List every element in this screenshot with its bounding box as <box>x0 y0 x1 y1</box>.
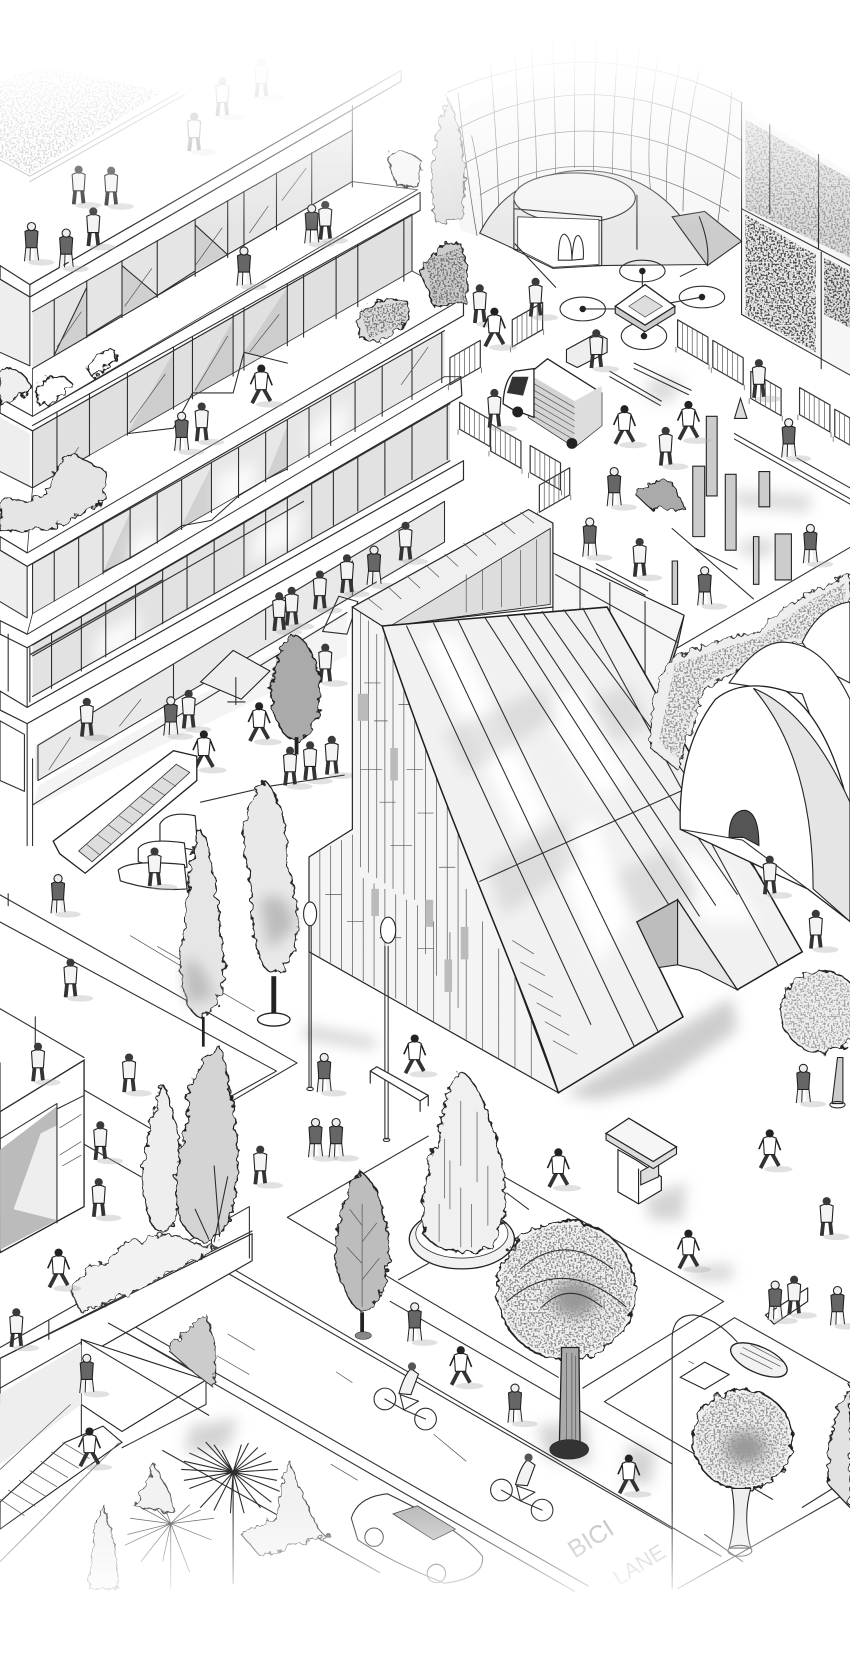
construction site <box>448 260 850 648</box>
stepped parapet <box>352 510 553 626</box>
domed greenhouse <box>431 41 743 287</box>
painted lane lettering: LANE <box>608 1539 670 1590</box>
mullions floor one <box>33 106 352 369</box>
site shadows <box>645 379 813 558</box>
balcony floors <box>27 182 463 634</box>
building corner <box>0 285 33 846</box>
central folded-roof pavilion <box>309 510 802 1100</box>
hedge behind arches <box>650 575 850 770</box>
steel bundles <box>596 363 850 595</box>
white washes on glass <box>92 401 347 667</box>
mullions floor four <box>30 404 450 702</box>
painted lane lettering <box>563 1515 670 1590</box>
structural slabs <box>0 70 463 724</box>
spiky shrubs <box>89 1461 331 1589</box>
pavilion ground shadow <box>564 997 737 1100</box>
cafe umbrella and courtyard tree <box>201 596 358 755</box>
lamp posts <box>304 902 396 1142</box>
rubble and cone <box>637 480 686 510</box>
back wing <box>553 553 684 732</box>
bench <box>370 1067 428 1112</box>
white arches <box>680 602 850 921</box>
right edge tree <box>781 971 850 1108</box>
kiosk <box>606 1118 677 1204</box>
ground washes <box>103 1025 732 1486</box>
right round tree <box>693 1390 792 1556</box>
cyclists <box>374 1362 553 1521</box>
generator crate <box>566 333 607 367</box>
dome inner hall <box>480 170 742 287</box>
site edges <box>672 268 850 648</box>
dome shell and ribs <box>436 41 743 266</box>
zigzag glass folds <box>54 225 287 572</box>
bush beside dome <box>431 98 465 222</box>
palm trees <box>125 1442 279 1589</box>
stairs <box>0 1404 122 1562</box>
barriers <box>448 302 850 518</box>
glass pavilion box <box>0 1009 84 1253</box>
steel columns <box>672 416 791 604</box>
top fade <box>0 0 850 228</box>
walkway hedge <box>71 1234 217 1312</box>
side facade <box>309 607 558 1093</box>
tall cypress tree one <box>181 830 224 1047</box>
convertible car <box>351 1494 483 1583</box>
vertical garden wall <box>742 103 850 375</box>
workers and upper people <box>24 58 833 790</box>
fountain tree with round planter <box>409 1071 514 1269</box>
mullions floor two <box>33 214 412 488</box>
glass shading <box>0 130 450 808</box>
main building <box>0 70 463 846</box>
folded roof plane <box>382 607 802 1093</box>
escalator and spiral steps <box>53 751 344 891</box>
faded roof garden <box>0 65 184 182</box>
twin cypress trees <box>143 1047 238 1242</box>
mullions floor three <box>33 331 445 614</box>
lower plaza people <box>10 856 850 1498</box>
sunbather on mat <box>680 1362 729 1389</box>
road dashes <box>130 936 694 1480</box>
leafy cypress tree <box>335 1171 389 1339</box>
dark dense band on floor four <box>30 580 163 655</box>
delivery truck <box>503 359 602 449</box>
terrace planter edge <box>0 894 297 1104</box>
elevated walkway <box>0 1090 252 1404</box>
survey drone <box>560 260 725 350</box>
lower scene <box>0 781 850 1591</box>
ground floor windows <box>0 501 445 846</box>
park bench <box>765 1288 808 1324</box>
plaza and road lines <box>114 1136 850 1591</box>
glass reflections <box>49 168 428 770</box>
bottom fade <box>0 1507 850 1670</box>
under-deck space <box>0 1315 216 1469</box>
terrace shrubs <box>0 152 468 531</box>
large round tree <box>497 1221 636 1459</box>
far right cypress <box>828 1385 850 1507</box>
tall cypress tree two <box>244 781 297 1026</box>
painted lane lettering: BICI <box>563 1515 619 1564</box>
street lamp <box>672 1315 792 1589</box>
